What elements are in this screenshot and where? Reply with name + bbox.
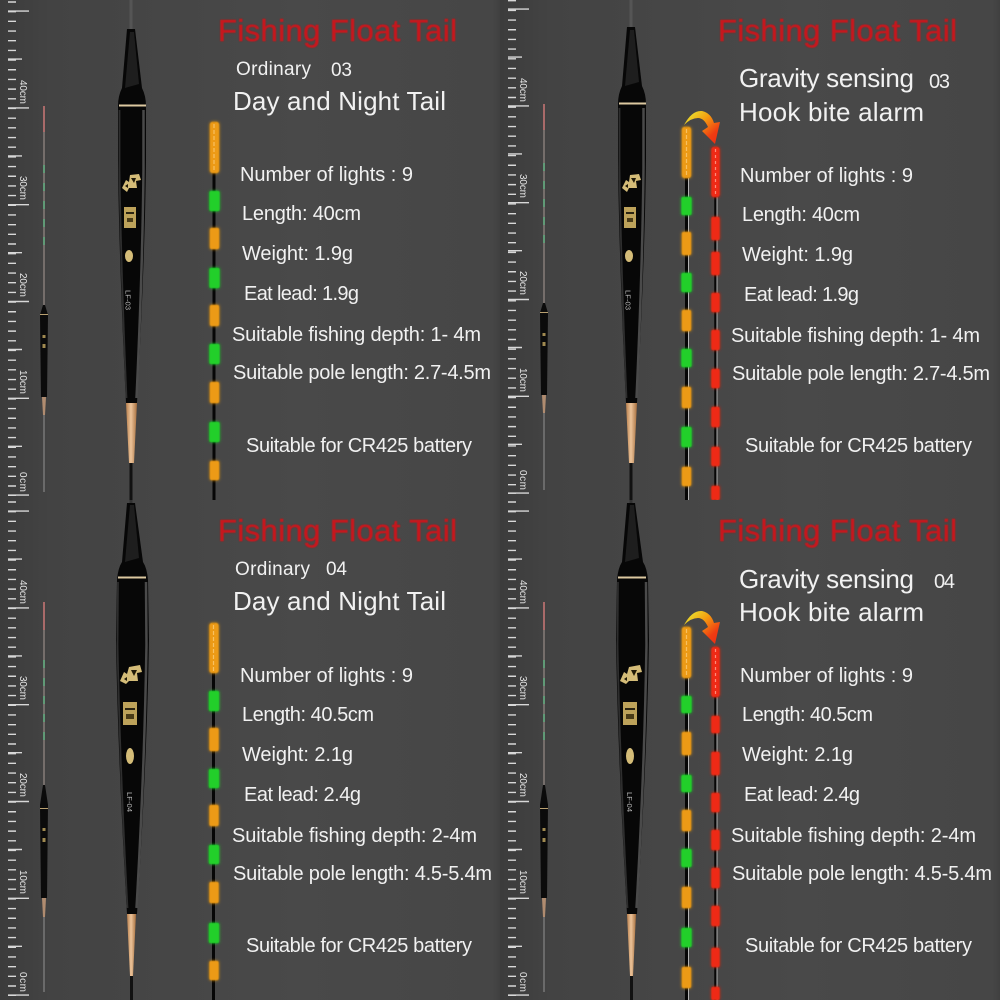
- logo decals: [622, 174, 641, 262]
- subtitle: type and model: Ordinary: [236, 59, 312, 80]
- heading: gravity sensing: 04: [934, 571, 955, 593]
- ruler: 10cm: [17, 870, 28, 894]
- specifications: Suitable fishing depth: 1- 4m: [731, 325, 980, 347]
- arrow: light change: [684, 111, 720, 144]
- specifications: Weight: 2.1g: [242, 744, 353, 766]
- main float: LF-03: [624, 290, 632, 310]
- subtitle: type and model: [236, 59, 352, 81]
- ruler: 40cm: [517, 580, 528, 604]
- ruler: 10cm: [517, 368, 528, 392]
- ruler: 20cm: [517, 773, 528, 797]
- panel: ordinary float 03: [0, 0, 500, 500]
- specifications: Suitable fishing depth: 2-4m: [731, 825, 976, 847]
- small float: [40, 106, 48, 492]
- specifications: Suitable for CR425 battery: [745, 435, 972, 457]
- heading: gravity sensing: Gravity sensing: [739, 564, 914, 594]
- ruler: [512, 0, 528, 494]
- LED tail column: normal state: [682, 127, 692, 500]
- ruler: 40cm: [517, 78, 528, 102]
- ruler: 20cm: [17, 773, 28, 797]
- specifications: [731, 165, 990, 457]
- specifications: Suitable pole length: 2.7-4.5m: [233, 362, 491, 384]
- ruler: 10cm: [517, 870, 528, 894]
- ruler: 30cm: [17, 176, 28, 200]
- title: Fishing Float Tail: [718, 13, 957, 48]
- LED tail column: [209, 623, 219, 1000]
- specifications: [232, 665, 492, 957]
- main float: [616, 500, 649, 1000]
- ruler: [512, 501, 528, 996]
- main float: [116, 500, 149, 1000]
- specifications: Eat lead: 1.9g: [244, 283, 359, 305]
- ruler: 0cm: [17, 972, 28, 992]
- LED tail column: [210, 122, 220, 500]
- panel: ordinary float 04: [0, 500, 500, 1000]
- ruler: 40cm: [17, 80, 28, 104]
- title: Fishing Float Tail: [718, 513, 957, 548]
- heading: hook bite alarm: Hook bite alarm: [739, 597, 924, 627]
- specifications: Weight: 2.1g: [742, 744, 853, 766]
- small float: [540, 602, 548, 992]
- ruler: 20cm: [517, 271, 528, 295]
- ruler: [12, 1, 28, 496]
- specifications: Eat lead: 2.4g: [744, 784, 860, 806]
- specifications: Number of lights : 9: [240, 665, 413, 687]
- ruler: 0cm: [517, 972, 528, 992]
- main float: LF-03: [124, 290, 132, 310]
- specifications: Suitable fishing depth: 1- 4m: [232, 324, 481, 346]
- subtitle: type and model: Ordinary: [235, 559, 310, 580]
- heading: gravity sensing: Gravity sensing: [739, 63, 914, 93]
- ruler: 0cm: [17, 472, 28, 492]
- specifications: Suitable pole length: 4.5-5.4m: [732, 863, 992, 885]
- specifications: Length: 40cm: [742, 204, 860, 226]
- specifications: [232, 164, 491, 457]
- specifications: Number of lights : 9: [240, 164, 413, 186]
- main float: [118, 0, 146, 500]
- main float: LF-04: [125, 792, 134, 812]
- logo decals: [122, 174, 141, 262]
- panel: gravity sensing float 04: [500, 500, 1000, 1000]
- specifications: Suitable for CR425 battery: [745, 935, 972, 957]
- specifications: Suitable pole length: 4.5-5.4m: [233, 863, 492, 885]
- panel: gravity sensing float 03: [500, 0, 1000, 500]
- specifications: Length: 40.5cm: [742, 704, 873, 726]
- main float: LF-04: [625, 792, 634, 812]
- LED tail column: normal state: [682, 627, 692, 1000]
- ruler: [12, 501, 28, 996]
- specifications: Length: 40.5cm: [242, 704, 374, 726]
- ruler: 20cm: [17, 273, 28, 297]
- LED tail column: alarm state: [712, 147, 720, 500]
- title: Fishing Float Tail: [218, 513, 457, 548]
- heading: hook bite alarm: Hook bite alarm: [739, 97, 924, 127]
- ruler: 10cm: [17, 370, 28, 394]
- logo decals: [120, 665, 142, 764]
- specifications: Suitable fishing depth: 2-4m: [232, 825, 477, 847]
- title: Fishing Float Tail: [218, 13, 457, 48]
- specifications: Weight: 1.9g: [242, 243, 353, 265]
- subtitle: type and model: 03: [331, 60, 352, 81]
- main float: [618, 0, 646, 500]
- specifications: Number of lights : 9: [740, 165, 913, 187]
- subtitle: type and model: 04: [326, 559, 347, 580]
- LED tail column: alarm state: [712, 647, 720, 1000]
- heading: gravity sensing: 03: [929, 71, 950, 93]
- specifications: Eat lead: 2.4g: [244, 784, 361, 806]
- ruler: 30cm: [517, 676, 528, 700]
- specifications: Length: 40cm: [242, 203, 361, 225]
- specifications: [731, 665, 992, 957]
- ruler: 30cm: [17, 676, 28, 700]
- heading: tail type: Day and Night Tail: [233, 86, 446, 116]
- ruler: 40cm: [17, 580, 28, 604]
- small float: [540, 104, 548, 490]
- specifications: Suitable for CR425 battery: [246, 935, 472, 957]
- specifications: Suitable pole length: 2.7-4.5m: [732, 363, 990, 385]
- specifications: Suitable for CR425 battery: [246, 435, 472, 457]
- ruler: 0cm: [517, 470, 528, 490]
- subtitle: type and model: [235, 559, 347, 580]
- heading: tail type: Day and Night Tail: [233, 586, 446, 616]
- logo decals: [620, 665, 642, 764]
- specifications: Number of lights : 9: [740, 665, 913, 687]
- small float: [40, 602, 48, 992]
- specifications: Weight: 1.9g: [742, 244, 853, 266]
- arrow: light change: [684, 611, 720, 644]
- ruler: 30cm: [517, 174, 528, 198]
- specifications: Eat lead: 1.9g: [744, 284, 859, 306]
